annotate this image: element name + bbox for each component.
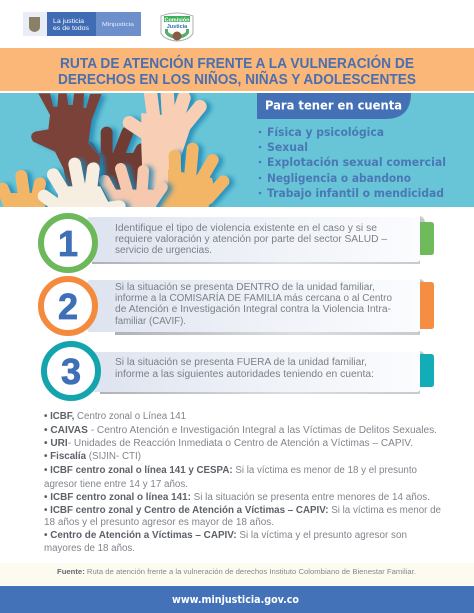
step 3 text: [115, 357, 374, 380]
list: types of violence: Negligencia o abandono: [267, 171, 411, 185]
logo: Comisión badge: Justicia: [167, 24, 188, 30]
cream hand: [44, 164, 119, 209]
step 2 text: de Atención e Investigación Integral contra la Violencia Intra-: [115, 304, 391, 315]
number badge 1: 1: [58, 223, 78, 264]
step 2 text: Si la situación se presenta DENTRO de la unidad familiar,: [115, 282, 375, 293]
footer: www.minjusticia.gov.co: [172, 593, 299, 606]
list: authorities: mayores de 18 años.: [44, 543, 135, 554]
step 1 text: [115, 223, 387, 256]
list: authorities: • CAIVAS - Centro Atención e Investigación Integral a las Víctimas de Delitos Sexuales.: [44, 425, 437, 436]
title: [58, 54, 416, 88]
callout header: Para tener en cuenta: Para tener en cuenta: [265, 98, 402, 112]
step 3 text: informe a las siguientes autoridades teniendo en cuenta:: [115, 369, 374, 380]
number badge 1: [41, 216, 95, 270]
list: authorities: 18 años y el presunto agresor es mayor de 18 años.: [44, 517, 274, 528]
step 1 text: requiere valoración y atención por parte del sector SALUD –: [115, 234, 387, 245]
footer: [0, 586, 474, 613]
step 1 text: Identifique el tipo de violencia existente en el caso y si se: [115, 223, 377, 234]
logo: Comisión badge: Comisión: [164, 18, 190, 24]
list: types of violence: Explotación sexual comercial: [267, 155, 446, 169]
peach hand: [129, 94, 200, 190]
tab green: [420, 222, 434, 255]
title: RUTA DE ATENCIÓN FRENTE A LA VULNERACIÓN DE: [60, 54, 414, 72]
title band: [0, 48, 474, 91]
list: authorities: • Fiscalía (SIJIN- CTI): [44, 451, 141, 462]
list: authorities: agresor tiene entre 14 y 17 años.: [44, 479, 188, 490]
callout header: Para tener en cuenta: [257, 93, 411, 119]
number badge 2: [41, 279, 95, 333]
list: types of violence: Sexual: [267, 140, 308, 154]
tab orange: [420, 282, 434, 329]
list: authorities: • Centro de Atención a Víctimas – CAPIV: Si la víctima y el presunto agresor son: [44, 530, 407, 541]
teal hero panel: [0, 93, 474, 209]
illustration: raised paper hands: [3, 93, 223, 209]
step 3 text: Si la situación se presenta FUERA de la unidad familiar,: [115, 357, 367, 368]
list: authorities: [44, 411, 441, 554]
list: authorities: • URI- Unidades de Reacción Inmediata o Centro de Atención a Víctimas – CAPIV.: [44, 438, 413, 449]
dark brown hand back: [88, 133, 143, 207]
list: types of violence: [259, 125, 446, 200]
tab teal: [420, 354, 434, 387]
list: types of violence: Trabajo infantil o mendicidad: [267, 186, 444, 200]
step 2 text: familiar (CAVIF).: [115, 316, 186, 327]
orange hand right: [159, 149, 223, 209]
dark brown hand front: [31, 93, 102, 193]
list: types of violence: Física y psicológica: [267, 125, 384, 139]
logo: Minjusticia: es de todos: [53, 26, 89, 32]
source strip: Fuente: Ruta de atención frente a la vulneración de derechos Instituto Colombiano de Bienestar Familiar.: [57, 569, 416, 576]
logo: Minjusticia: La justicia: [53, 19, 85, 25]
title: DERECHOS EN LOS NIÑOS, NIÑAS Y ADOLESCENTES: [58, 70, 416, 88]
logo: Minjusticia: Minjusticia: [102, 22, 135, 28]
step 2 text: informe a la COMISARÍA DE FAMILIA más cercana o al Centro: [115, 291, 392, 304]
number badge 3: [44, 344, 98, 398]
list: authorities: • ICBF centro zonal y Centro de Atención a Víctimas – CAPIV: Si la víctima es menor de: [44, 505, 441, 516]
list: authorities: • ICBF, Centro zonal o Línea 141: [44, 411, 186, 422]
source strip: [0, 563, 474, 585]
number badge 2: 2: [58, 286, 78, 327]
orange hand left: [3, 176, 46, 209]
list: authorities: • ICBF centro zonal o línea 141: Si la situación se presenta entre menores de 14 años.: [44, 492, 430, 503]
logo: Comisión badge: [161, 13, 193, 41]
step 1: [41, 216, 434, 270]
number badge 3: 3: [61, 351, 81, 392]
step 2 text: [115, 282, 392, 327]
pink hand: [105, 169, 162, 209]
step 3: [44, 344, 434, 398]
step 2: [41, 279, 434, 335]
list: authorities: • ICBF centro zonal o línea 141 y CESPA: Si la víctima es menor de 18 y el presunto: [44, 465, 417, 476]
step 1 text: servicio de urgencias.: [115, 245, 212, 256]
logo: Minjusticia: [23, 12, 141, 36]
